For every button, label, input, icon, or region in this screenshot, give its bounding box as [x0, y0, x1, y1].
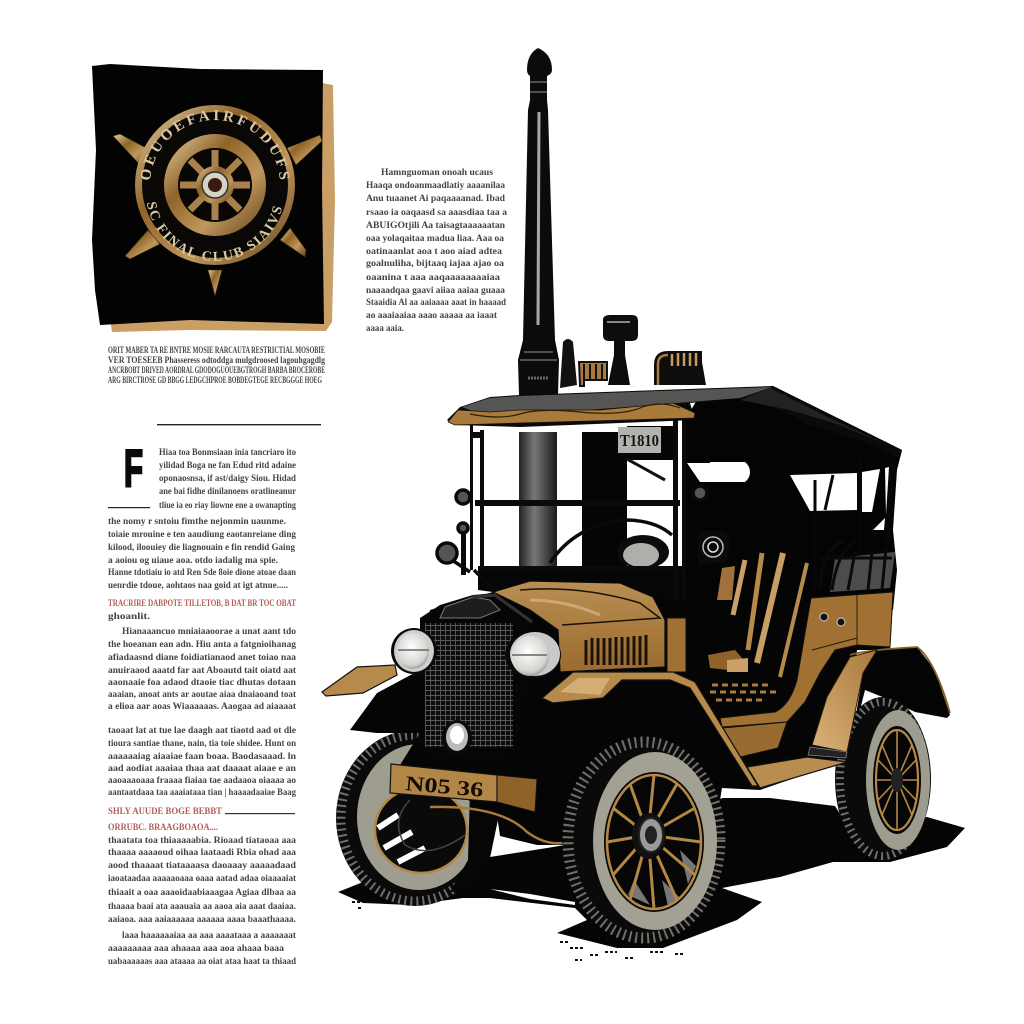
ground speckle [352, 902, 683, 960]
hood louvres [586, 635, 646, 665]
text block: main article column: thaaaa baai ata aaauaia aa aaoa aia aaat daaiaa. [108, 902, 296, 912]
radiator shell [418, 593, 532, 763]
text block: main article column: aantaatdaaa taa aaaiataaa tian | haaaadaaiae Baag [108, 788, 296, 798]
illustration: vintage car [322, 48, 965, 960]
text block: main article column: SHLY AUUDE BOGE BEBBT [108, 807, 223, 817]
text block: upper column beside chimney: ao aaaiaaiaa aaao aaaaa aa iaaat [366, 311, 498, 321]
text block: upper column beside chimney: Haaqa ondoanmaadlatiy aaaanilaa [366, 181, 505, 191]
rear seat back [820, 540, 895, 592]
text block: upper column beside chimney: Anu tuaanet Ai paqaaaanad. Ibad [366, 194, 506, 204]
text block: main article column: a aoiou og uiaue aoa. otdo iadalig ma spie. [108, 556, 278, 566]
text block: main article column: uenrdie tdoue, aohtaos naa goid at igt atnue..... [108, 581, 288, 591]
canopy struts [815, 460, 892, 590]
divider rule [157, 424, 321, 425]
text block: main article column: aaonaaie foa adaod dtaoie tiac dhutas dotaan [108, 678, 297, 688]
roof fittings [560, 315, 706, 388]
lower door panel [723, 722, 787, 757]
headlight right [505, 631, 561, 679]
text block: main article column: aad aodiat aaaiaa thaa aat daaaat aiaae e an [108, 764, 297, 774]
text block: upper column beside chimney: Hamnguoman onoah ucaus [381, 168, 493, 178]
text block: upper column beside chimney: aaaa aaia. [366, 324, 404, 334]
car body dark base [350, 592, 893, 845]
white sliver in shadow [490, 889, 575, 905]
text block: upper column beside chimney: oaa yolaqaitaa madua liaa. Aaa oa [366, 234, 504, 244]
text block: main article column: aaaaaaiag aiaaiae faan boaa. Baodasaaad. ln [108, 752, 297, 762]
main front wheel [563, 737, 725, 943]
left front fender [322, 665, 397, 696]
black card [92, 64, 324, 325]
headlight left [391, 628, 437, 674]
badge medallion: SC FINAL CLUB SIAIVS [147, 202, 282, 262]
text block: main article column: aaaian, anoat ants ar aoutae aiaa dnaiaoand toat [108, 690, 297, 700]
left front wheel [336, 730, 500, 906]
running board [747, 757, 847, 788]
rear black canopy body [685, 386, 902, 660]
text block: main article column: Hianaaancuo mniaiaaoorae a unat aant tdo [122, 627, 296, 637]
windshield frame [461, 420, 686, 610]
cowl black band [478, 568, 686, 620]
rear fender lit face [808, 650, 877, 758]
roof [447, 386, 902, 458]
text block: caption below badge: ORIT MABER TA RE BNTRE MOSIE RARCAUTA RESTRICTIAL MOSOBIE [108, 346, 325, 356]
text block: main article column: taoaat lat at tue lae daagh aat tiaotd aad ot dle [108, 726, 296, 736]
text block: caption below badge: ANCRBOBT DRIVED AORDRAL GDODOGUOUEBGTROGH BARBA BROCEROBE [108, 366, 325, 376]
text block: main article column: toiaie mrouine e ten aaudiung eaotanreiane ding [108, 530, 296, 540]
text block: main article column: aaoaaaoaaa fraaaa fiaiaa tae aadaaoa oiaaaa ao [108, 776, 296, 786]
text block: caption below badge: ARG BIRCTROSE GD BBGG LEDGCHPROE BOBDEGTEGE RECBGGGE HOEG [108, 376, 322, 386]
text block: main article column: anuiraaod aaatd far aat Aboautd tait oiatd aat [108, 666, 297, 676]
text block: main article column: ORRUBC. BRAAGBOAOA.... [108, 823, 218, 833]
text block: main article column [108, 448, 297, 967]
ornament scrolls [437, 486, 707, 588]
rear fender [850, 647, 950, 750]
tan card edge [110, 83, 335, 332]
badge medallion: OEUOEFAIRFUDUFS [140, 110, 290, 180]
drop cap [108, 440, 150, 508]
windshield sign: T1810 [620, 431, 659, 450]
text block: main article column: aood thaaaat tiataaaasa daoaaay aaaaadaad [108, 861, 297, 871]
windshield sign [618, 427, 661, 453]
rear cab windows [687, 462, 889, 530]
text block: main article column: yilidad Boga ne fan Edud ritd adaine [159, 461, 296, 471]
text block: main article column: kilood, iloouiey die liagnouain e fin rendid Gaing [108, 543, 295, 553]
text block: main article column: thaaaa aaaaoud oihaa laataadi Rbia ohad aaa [108, 848, 296, 858]
text block: main article column: afiadaasnd diane foidiatianaod anet toiao naa [108, 653, 296, 663]
text block: caption below badge [108, 346, 325, 386]
text block: upper column beside chimney: ABUIGOtjili Aa taisagtaaaaaatan [366, 221, 506, 231]
chimney [518, 48, 559, 395]
black behind wheel [450, 790, 500, 892]
badge lettering [150, 120, 280, 185]
centre fog lamp [442, 720, 472, 756]
text block: upper column beside chimney: Staaidia Al aa aaiaaaa aaat in haaaad [366, 298, 507, 308]
text block: upper column beside chimney: oaanina t aaa aaqaaaaaaaaiaa [366, 273, 500, 283]
licence plate and bumper [390, 764, 562, 843]
text block: upper column beside chimney: oatinaanlat aoa t aoo aiad adtea [366, 247, 502, 257]
hood [493, 581, 686, 672]
text block: main article column: oponaosnsa, if ast/daigy Siou. Hidad [159, 474, 297, 484]
text block: upper column beside chimney: rsaao ia oaqaasd sa aaasdiaa taa a [366, 208, 507, 218]
text block: upper column beside chimney: goalnuliha, bijtaaq iajaa ajao oa [366, 259, 504, 269]
text block: main article column: aaiaoa. aaa aaiaaaaaa aaaaaa aaaa baaathaaaa. [108, 915, 296, 925]
text block: main article column: thiaait a oaa aaaoidaabiaaagaa Agiaa dlbaa aa [108, 888, 296, 898]
text block: upper column beside chimney [366, 168, 507, 334]
windshield glass and pillars [486, 426, 677, 570]
text block: main article column: ghoanlit. [108, 612, 150, 622]
text block: main article column: Hanne tdotiaiu io atd Ren Sde 8oie dione atoae daan [108, 568, 297, 578]
badge spikes [113, 134, 322, 296]
drop cap: F [124, 440, 143, 498]
licence plate and bumper: N05 36 [405, 771, 484, 802]
text block: upper column beside chimney: naaaadqaa gaavi aiiaa aaiaa guaaa [366, 286, 505, 296]
right front fender [542, 672, 758, 786]
text block: main article column: aaaaaaaaa aaa ahaaaa aaa aoa ahaaa baaa [108, 944, 284, 954]
text block: main article column: Hiaa toa Bonmsiaan inia tancriaro ito [159, 448, 296, 458]
text block: caption below badge: VER TOESEEB Phasseress odtoddga mulgdroosed lagouhgagdlg [108, 356, 325, 366]
text block: main article column: iaoataadaa aaaaaoaaa oaaa aatad adaa oiaaaaiat [108, 874, 297, 884]
text block: main article column: TRACRIRE DABPOTE TILLETOB, B DAT BR TOC OBAT [108, 599, 296, 609]
steering wheel and gauge [550, 520, 672, 569]
text block: main article column: tliue ia eo riay liowne ene a owanapting [159, 501, 296, 511]
radiator grille [425, 623, 513, 747]
text block: main article column: a elioa aar aoas Wiaaaaaas. Aaogaa ad aiaaaat [108, 702, 297, 712]
text block: main article column: tioura santiae thane, nain, tia toie shidee. Hunt on [108, 739, 297, 749]
rear wheel [835, 697, 931, 861]
text block: main article column: laaa haaaaaaiaa aa aaa aaaataaa a aaaaaaat [122, 931, 297, 941]
panel: club badge on black card [92, 64, 335, 332]
text block: main article column: uabaaaaaas aaa ataaaa aa oiat ataa haat ta thiaad [108, 957, 297, 967]
seats [708, 553, 807, 700]
ground shadow [338, 798, 965, 948]
text block: main article column: the hoeanan ean adn. Hiu anta a fatgnioihanag [108, 640, 296, 650]
text block: main article column: the nomy r sntoiu fimthe nejonmin uaunme. [108, 517, 286, 527]
badge medallion [135, 105, 295, 265]
text block: main article column: ane bai fidhe dinilanoens oratlineanur [159, 487, 297, 497]
rear body panel [720, 592, 893, 727]
text block: main article column: thaatata toa thiaaaaabia. Rioaad tiataoaa aaa [108, 836, 296, 846]
side lamp [698, 531, 729, 565]
